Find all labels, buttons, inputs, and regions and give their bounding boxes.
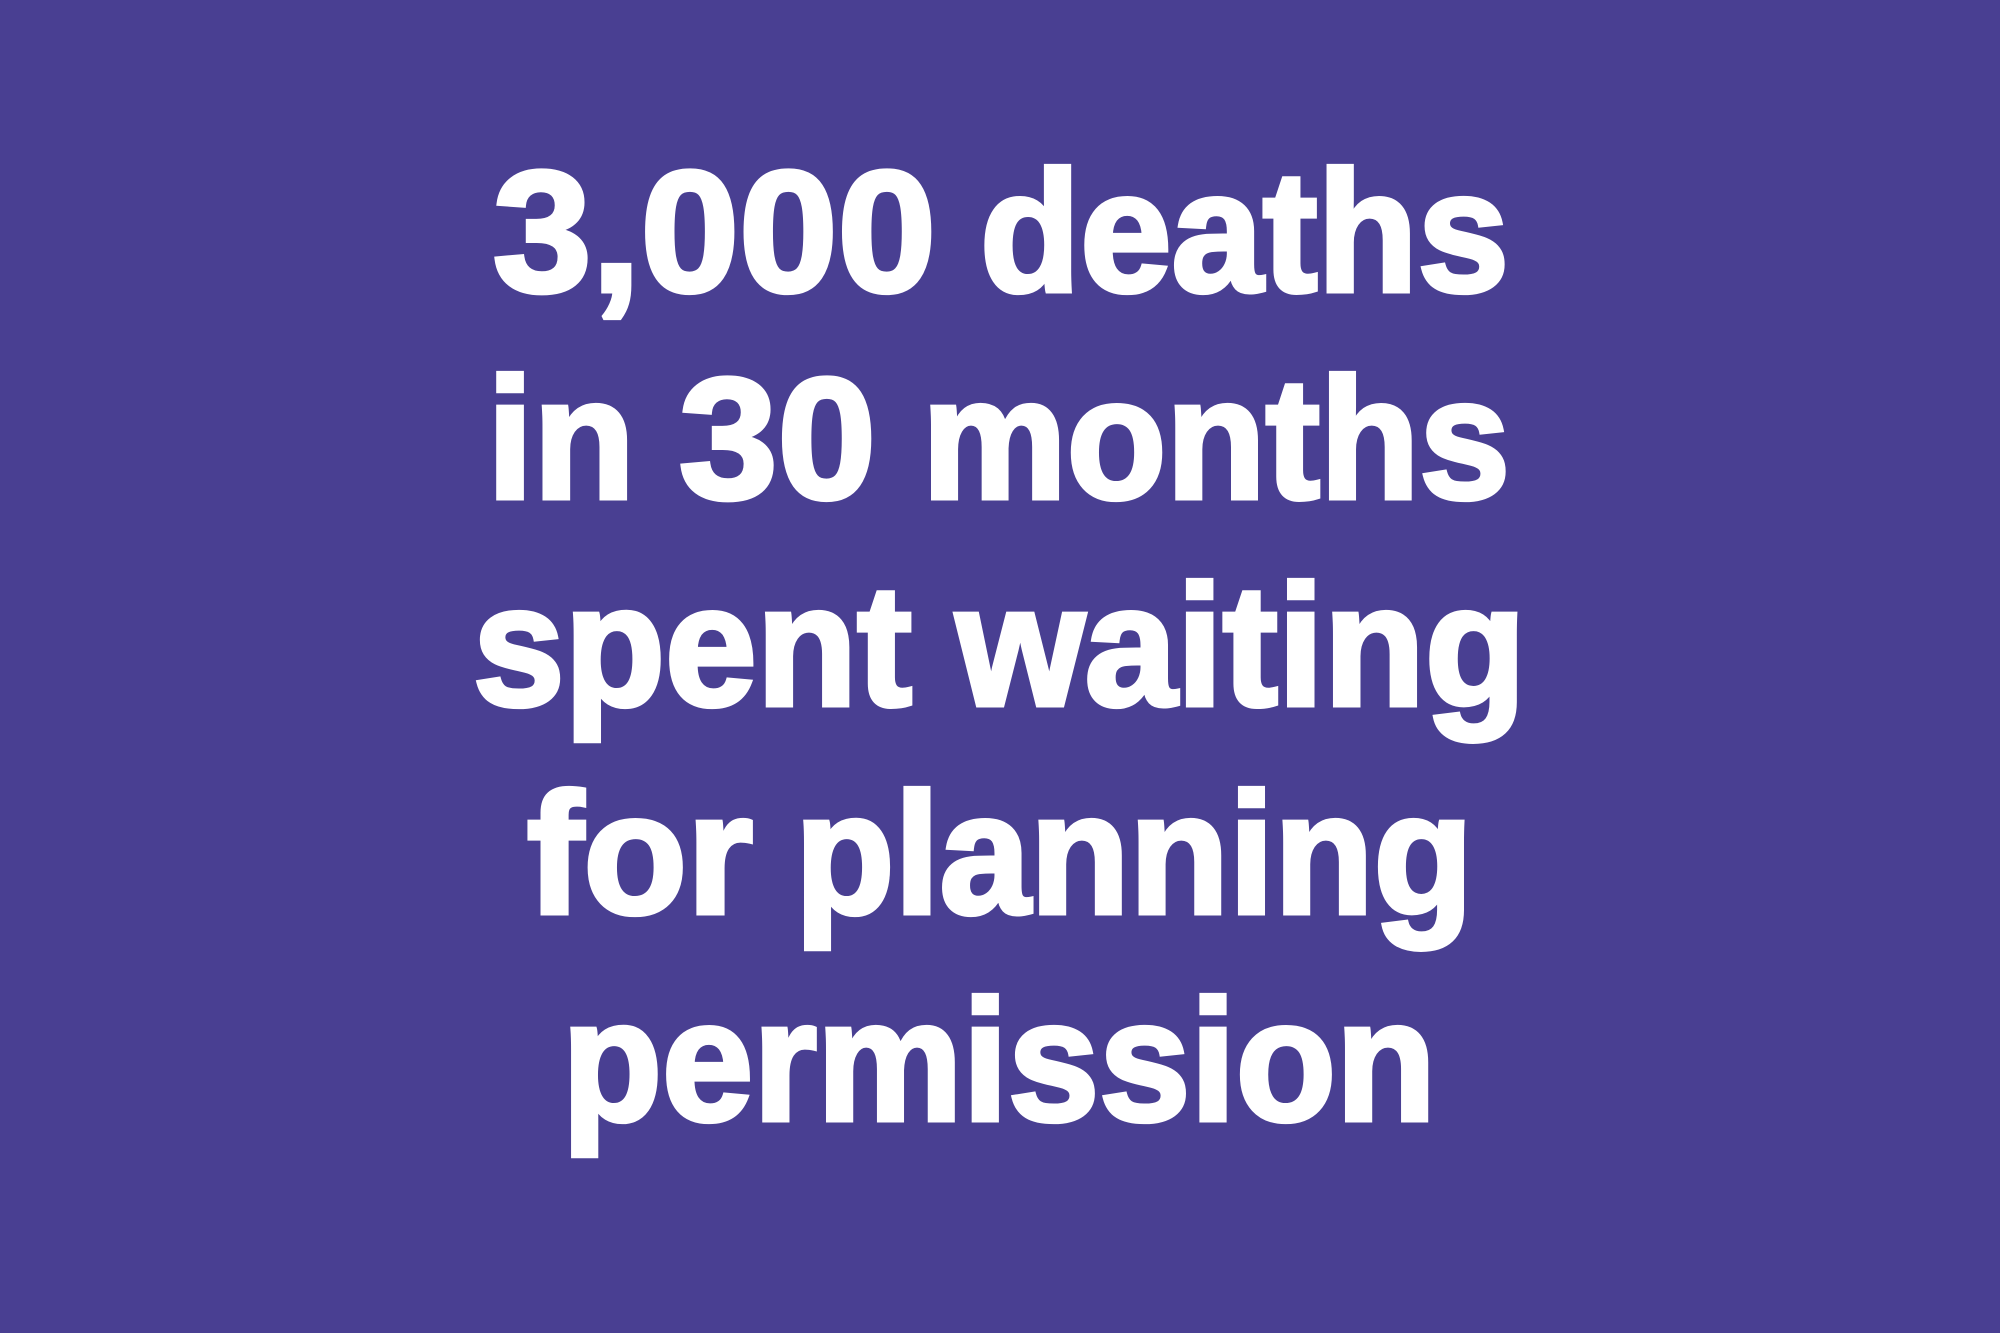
text line 1 (493, 136, 1509, 328)
text line 3: spent (473, 550, 912, 742)
text line 2: 30 (679, 343, 876, 535)
text line 3 (473, 550, 1526, 742)
text line 1: 3,000 (493, 136, 936, 328)
text line 5: permission (562, 965, 1436, 1157)
text line 2: in (487, 343, 635, 535)
title: statement text (473, 136, 1526, 1157)
text line 3: waiting (955, 550, 1526, 742)
text line 4 (527, 758, 1473, 950)
text line 2 (487, 343, 1510, 535)
text line 2: months (922, 343, 1510, 535)
text line 4: planning (795, 758, 1473, 950)
text line 4: for (527, 758, 753, 950)
text line 1: deaths (980, 136, 1509, 328)
